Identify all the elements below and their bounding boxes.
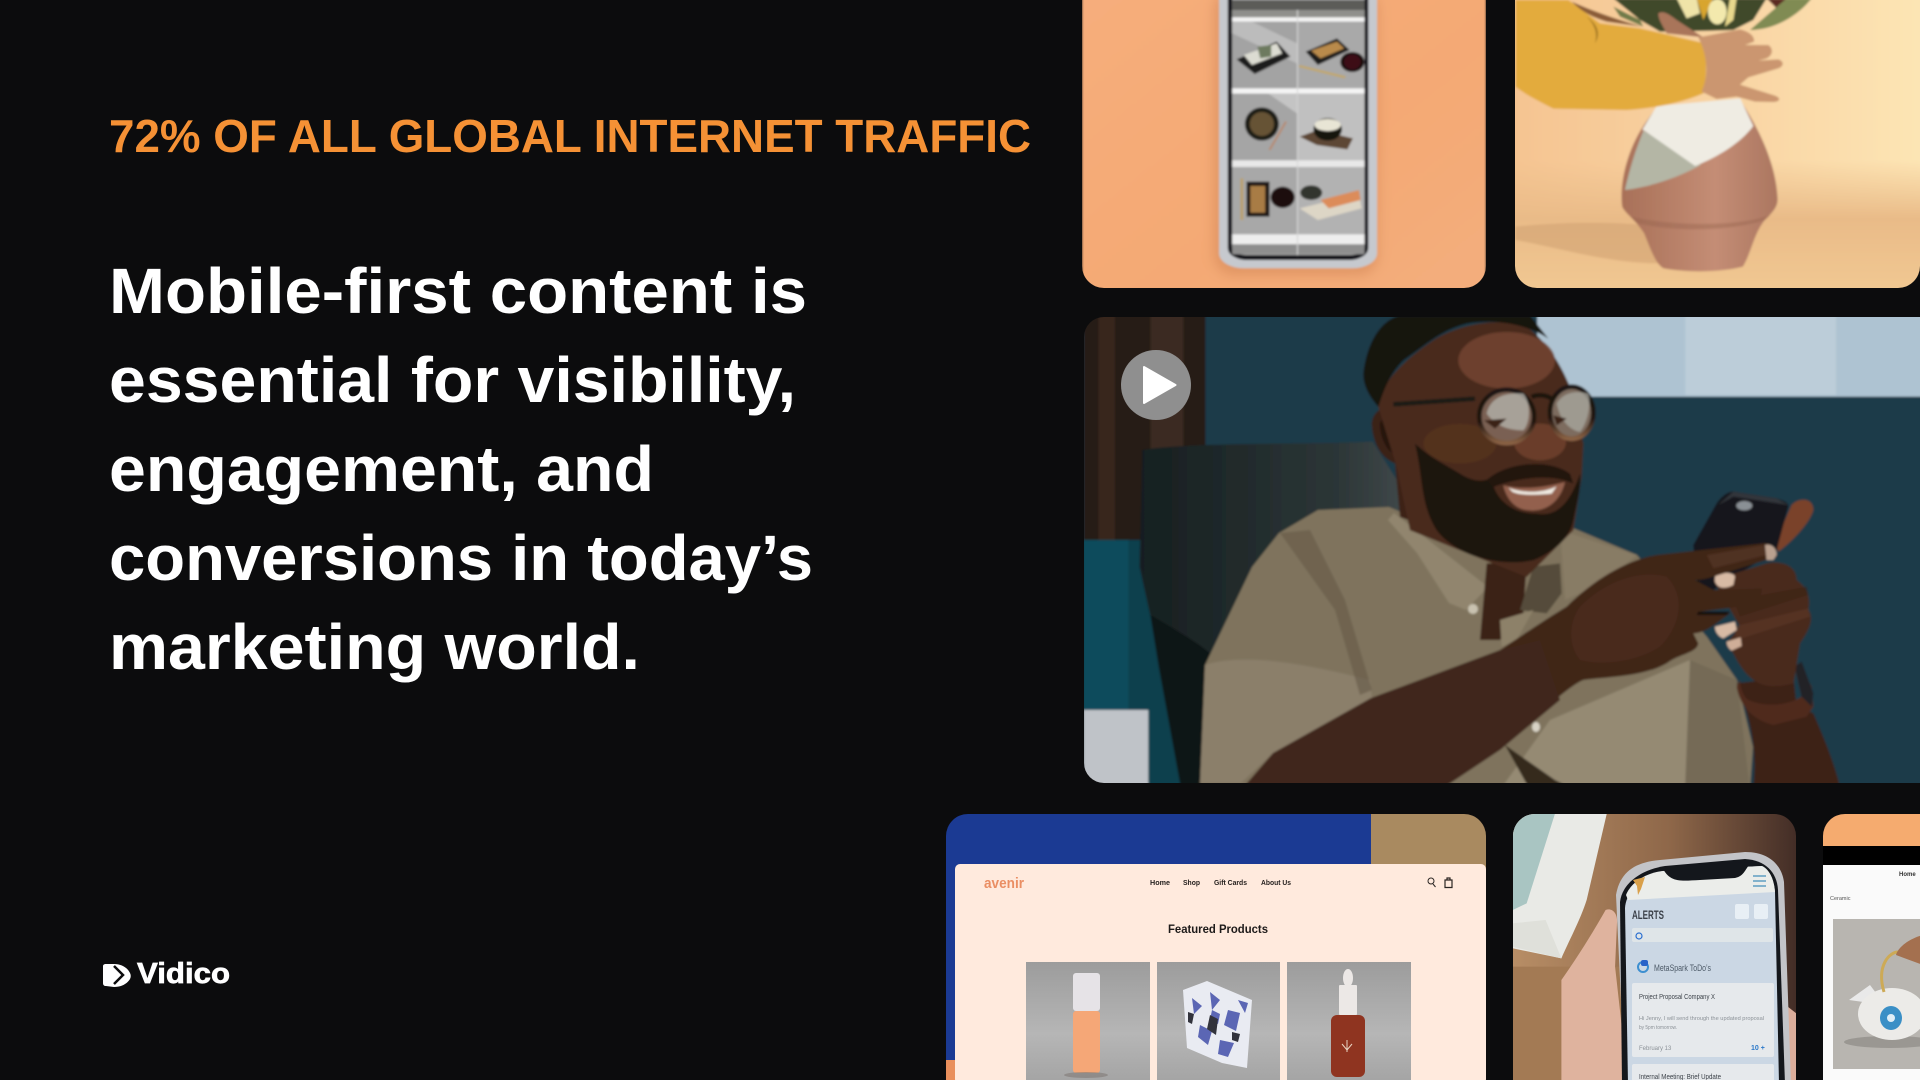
second alert card (1632, 1064, 1774, 1080)
head and face (1363, 315, 1593, 577)
shirt (1200, 507, 1753, 790)
page navigation: Gift Cards (1214, 878, 1247, 887)
hair (1363, 315, 1548, 407)
logo: Vidico (103, 958, 230, 990)
office chair (1140, 442, 1422, 787)
eyeglasses (1393, 387, 1593, 443)
icon: phone body (1219, 0, 1377, 268)
website mockup card: avenir (946, 814, 1487, 1080)
main statement: Mobile-first content is (109, 255, 807, 327)
smartphone and hands (1500, 492, 1840, 787)
icon: logo play mark (103, 964, 131, 987)
food items on phone screen (1237, 38, 1364, 220)
section heading: Featured Products (1168, 922, 1268, 936)
smartphone with app: 10 + (1751, 1045, 1765, 1052)
main statement (109, 255, 813, 683)
page navigation (1150, 880, 1291, 886)
website mockup card: ceramic teapot (1823, 814, 1920, 1080)
vase (1622, 98, 1778, 271)
yellow sleeve and hand (1516, 0, 1783, 110)
product photo: terrazzo box (1157, 962, 1280, 1080)
page navigation: About Us (1261, 878, 1291, 887)
page navigation: Shop (1183, 878, 1200, 887)
room background (1082, 313, 1920, 787)
main statement: marketing world. (109, 611, 640, 683)
page label: Ceramic: Ceramic (1830, 896, 1851, 902)
eyebrow heading: 72% OF ALL GLOBAL INTERNET TRAFFIC (109, 110, 1031, 162)
web page panel (955, 864, 1486, 1080)
product photo: red dropper bottle (1287, 962, 1411, 1080)
neck and collar (1480, 563, 1562, 647)
main statement: engagement, and (109, 433, 654, 505)
flowers (1613, 0, 1812, 32)
page navigation: Home (1150, 878, 1170, 887)
smartphone with app: MetaSpark ToDo’s (1654, 963, 1711, 973)
app section label (1638, 962, 1648, 972)
video card: man smiling at phone (1082, 313, 1920, 790)
alerts title: ALERTS (1632, 908, 1664, 922)
main statement: essential for visibility, (109, 344, 796, 416)
smartphone with app (1616, 852, 1791, 1080)
search box (1632, 928, 1773, 942)
app logo (1633, 877, 1645, 895)
smartphone with app: Hi Jenny, I will send through the updated proposal (1639, 1016, 1764, 1022)
product photo: orange tube (1026, 962, 1150, 1080)
photo card: hand holding phone with alerts app (1511, 813, 1801, 1080)
icons: search and bag (1428, 878, 1452, 888)
alert card (1632, 983, 1774, 1057)
picture frame (1513, 813, 1607, 958)
hand (1561, 909, 1628, 1080)
main statement: conversions in today’s (109, 522, 813, 594)
photo card: phone showing food grid (1082, 0, 1486, 290)
icon: play button (1121, 350, 1191, 420)
product photo: teapot (1833, 919, 1920, 1069)
beard (1415, 444, 1580, 562)
app menu icon (1753, 876, 1766, 886)
page brand: avenir (984, 875, 1024, 892)
left wrist and watch (1737, 662, 1840, 787)
left hand (1713, 562, 1811, 686)
smartphone with app: February 13 (1639, 1046, 1672, 1052)
smartphone (1693, 492, 1813, 590)
right hand and forearm (1500, 542, 1779, 698)
lower forearm (1246, 650, 1560, 783)
smartphone with app: by 5pm tomorrow. (1639, 1025, 1677, 1031)
page label: Home: Home (1899, 872, 1916, 878)
photo card: vase and yellow sweater (1510, 0, 1920, 300)
smartphone with app: Project Proposal Company X (1639, 992, 1715, 1001)
logo: Vidico: Vidico (137, 958, 230, 990)
